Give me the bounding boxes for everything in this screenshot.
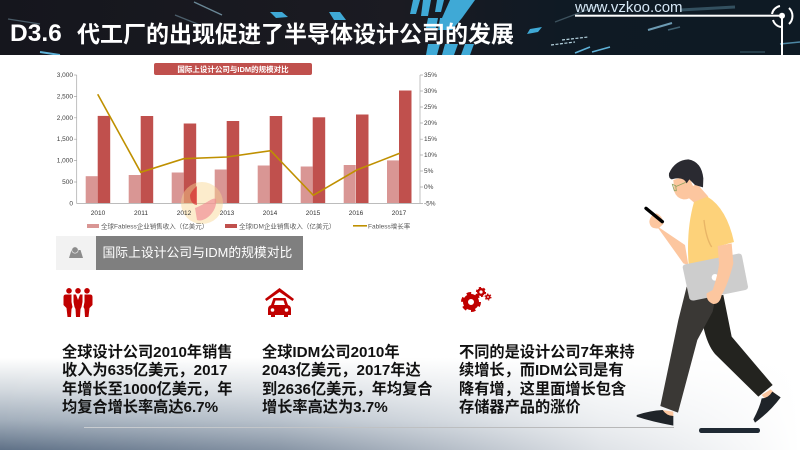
text: IDM summary: 2043亿美元，2017年达 bbox=[262, 362, 421, 379]
text: comparison note: 不同的是设计公司7年来持 bbox=[459, 344, 635, 361]
icon: gears bbox=[461, 287, 492, 312]
back leg bbox=[700, 295, 773, 397]
right axis labels: 5% bbox=[424, 168, 434, 175]
left axis labels: 1,000 bbox=[57, 158, 73, 165]
text: comparison note: 降有增，这里面增长包含 bbox=[459, 381, 626, 398]
left axis labels: 0 bbox=[69, 200, 73, 207]
text: fabless summary: 均复合增长率高达6.7% bbox=[62, 399, 218, 416]
icon: car under roof bbox=[265, 288, 294, 317]
ankle front bbox=[662, 410, 673, 417]
left axis labels: 1,500 bbox=[57, 136, 73, 143]
text: comparison note bbox=[459, 344, 635, 416]
chart legend: Fabless增长率 bbox=[368, 222, 411, 230]
ankle back bbox=[762, 389, 777, 401]
arm and neck skin bbox=[649, 213, 688, 265]
text: fabless summary: 年增长至1000亿美元，年 bbox=[62, 381, 232, 398]
right axis labels: 20% bbox=[424, 120, 437, 127]
front leg bbox=[660, 287, 715, 413]
chart legend: 全球IDM企业销售收入（亿美元） bbox=[239, 222, 335, 230]
caption text bbox=[96, 236, 303, 270]
left axis labels: 3,000 bbox=[57, 72, 73, 79]
right axis labels: 0% bbox=[424, 184, 434, 191]
right axis labels: 10% bbox=[424, 152, 437, 159]
title: D3.6 bbox=[10, 20, 62, 47]
right axis labels: 35% bbox=[424, 72, 437, 79]
logo mark with lines bbox=[575, 5, 794, 55]
right axis labels: 30% bbox=[424, 88, 437, 95]
year labels: 2011 bbox=[134, 210, 148, 217]
face bbox=[673, 175, 694, 199]
bottom gradient background bbox=[0, 350, 800, 450]
year labels: 2017 bbox=[392, 210, 407, 217]
right axis labels bbox=[424, 72, 437, 207]
forearm and hand bbox=[707, 243, 733, 304]
growth line bbox=[98, 94, 400, 195]
text: IDM summary: 增长率高达为3.7% bbox=[262, 399, 388, 416]
year labels: 2014 bbox=[263, 210, 278, 217]
text: IDM summary bbox=[262, 344, 432, 416]
divider line bbox=[84, 426, 674, 428]
right axis labels: -5% bbox=[424, 200, 436, 207]
icon: people bbox=[64, 288, 92, 317]
year labels: 2013 bbox=[220, 210, 235, 217]
glasses bbox=[672, 182, 686, 191]
chart legend bbox=[87, 222, 411, 230]
text: fabless summary: 全球设计公司2010年销售 bbox=[62, 344, 232, 361]
chart title: 国际上设计公司与IDM的规模对比 bbox=[177, 64, 289, 74]
hair bbox=[669, 159, 703, 187]
watermark bbox=[181, 182, 223, 224]
text: fabless summary: 收入为635亿美元，2017 bbox=[62, 362, 227, 379]
bar and line chart bbox=[57, 63, 437, 230]
left axis labels bbox=[57, 72, 73, 207]
title: 代工厂的出现促进了半导体设计公司的发展 bbox=[77, 21, 514, 47]
left axis labels: 2,500 bbox=[57, 93, 73, 100]
chart legend: 全球Fabless企业销售收入（亿美元） bbox=[101, 222, 208, 230]
caption icon bbox=[56, 236, 96, 270]
laptop bbox=[683, 254, 748, 300]
shoes bbox=[637, 410, 673, 426]
year labels bbox=[91, 210, 407, 217]
text: IDM summary: 到2636亿美元，年均复合 bbox=[262, 381, 432, 398]
illustration: walking man bbox=[636, 159, 781, 433]
chart title bbox=[154, 63, 312, 75]
right axis labels: 25% bbox=[424, 104, 437, 111]
year labels: 2010 bbox=[91, 210, 106, 217]
text: comparison note: 存储器产品的涨价 bbox=[459, 399, 580, 416]
text: IDM summary: 全球IDM公司2010年 bbox=[262, 344, 400, 361]
year labels: 2015 bbox=[306, 210, 321, 217]
left axis labels: 2,000 bbox=[57, 115, 73, 122]
phone bbox=[646, 208, 662, 222]
fabless bars bbox=[86, 160, 399, 203]
ground shadow bbox=[699, 428, 760, 433]
caption bar bbox=[56, 236, 303, 270]
year labels: 2016 bbox=[349, 210, 364, 217]
IDM bars bbox=[98, 90, 411, 203]
chart axes bbox=[74, 75, 423, 203]
shirt bbox=[688, 197, 734, 265]
caption text: 国际上设计公司与IDM的规模对比 bbox=[102, 245, 292, 260]
text: fabless summary bbox=[62, 344, 232, 416]
header banner bbox=[0, 0, 800, 55]
year labels: 2012 bbox=[177, 210, 192, 217]
left axis labels: 500 bbox=[62, 179, 73, 186]
right axis labels: 15% bbox=[424, 136, 437, 143]
text: comparison note: 续增长，而IDM公司是有 bbox=[459, 362, 624, 379]
